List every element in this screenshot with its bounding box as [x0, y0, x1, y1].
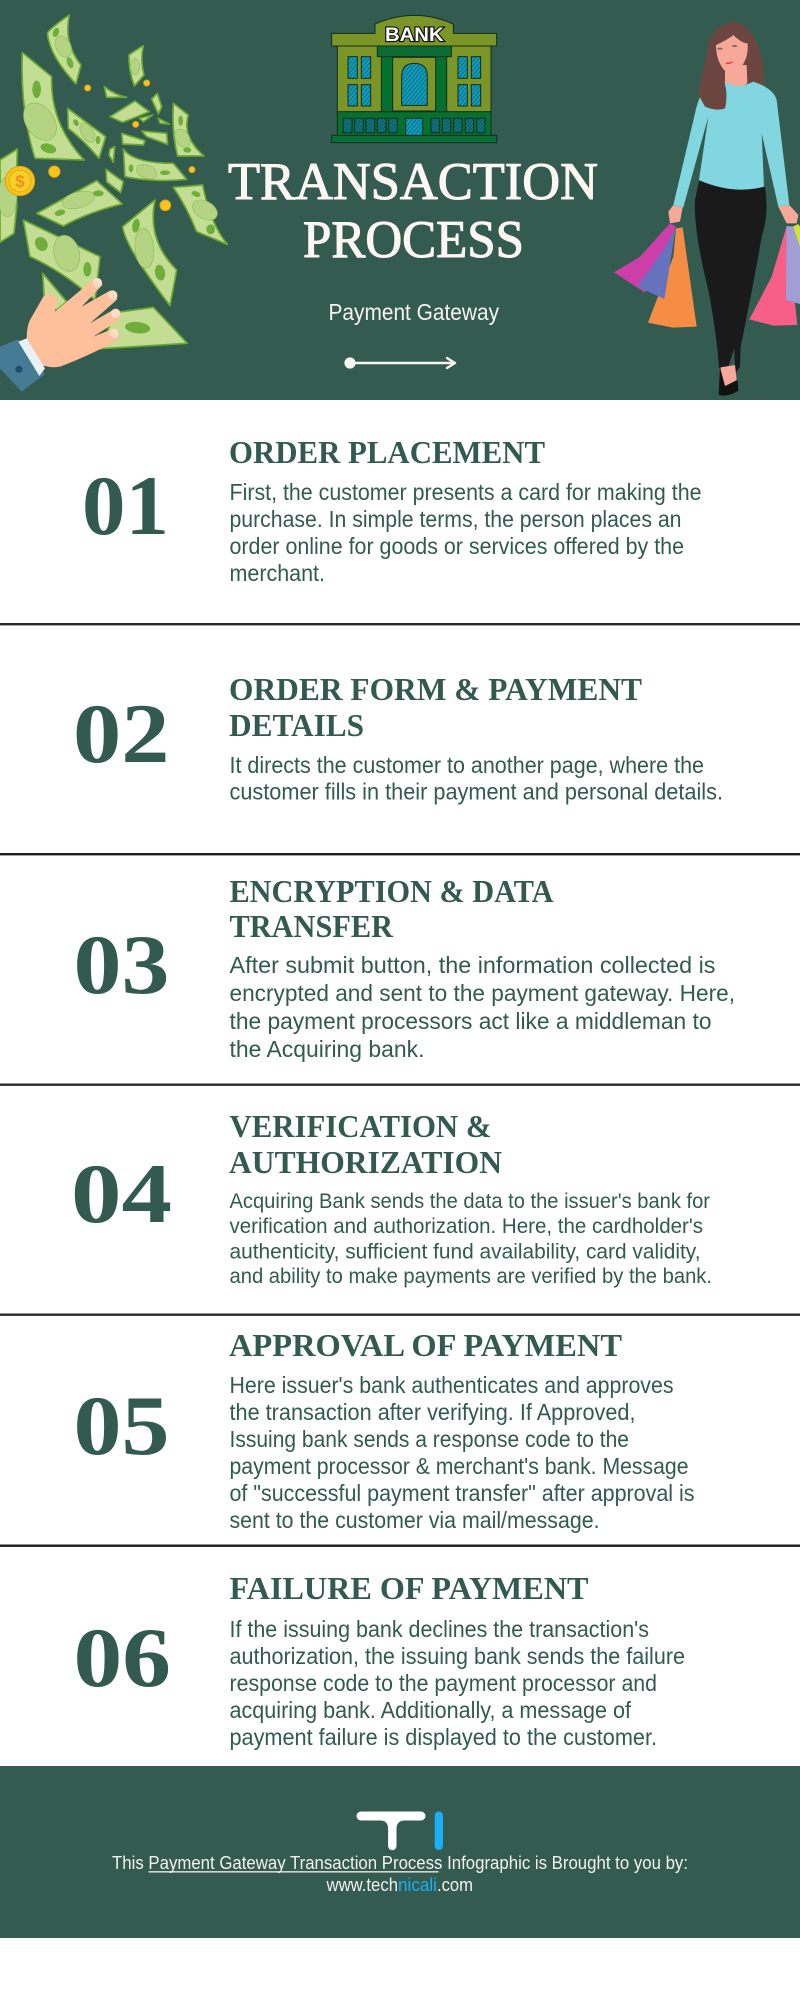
panel: step 1 order placement — [82, 434, 702, 586]
heading: encryption and data transfer — [230, 873, 554, 944]
icon: TI logo — [356, 1812, 443, 1850]
icon: hand with sleeve — [0, 278, 120, 392]
title: PROCESS — [303, 211, 524, 269]
title — [228, 153, 598, 269]
icon: bank windows — [343, 57, 485, 135]
text: website: nicali — [398, 1875, 437, 1895]
text: step 5 description: the transaction after verifying. If Approved, — [230, 1399, 636, 1425]
step number 01: 01 — [82, 459, 169, 553]
footer panel — [0, 1766, 800, 1938]
text: step 3 description — [230, 952, 735, 1062]
text: step 5 description — [230, 1372, 694, 1533]
text: step 6 description: acquiring bank. Additionally, a message of — [230, 1697, 631, 1723]
text: step 3 description: After submit button, the information collected is — [230, 952, 716, 978]
step number 04: 04 — [71, 1147, 172, 1241]
header panel — [0, 0, 800, 400]
text: step 5 description: Here issuer's bank authenticates and approves — [230, 1372, 674, 1398]
text: step 2 description — [230, 752, 723, 804]
text: step 6 description: If the issuing bank declines the transaction's — [230, 1616, 649, 1642]
step number 02: 02 — [73, 687, 170, 781]
heading: order form and payment details — [229, 671, 642, 743]
subtitle: Payment Gateway — [328, 299, 499, 325]
step number 06: 06 — [74, 1611, 171, 1705]
heading: encryption and data transfer: TRANSFER — [230, 908, 394, 944]
heading: order form and payment details: ORDER FORM & PAYMENT — [229, 671, 642, 707]
heading: order form and payment details: DETAILS — [229, 707, 364, 743]
icon: banknotes — [0, 15, 227, 349]
bank sign: BANK — [385, 25, 444, 46]
heading: verification and authorization: AUTHORIZATION — [229, 1144, 502, 1180]
text: step 6 description — [230, 1616, 685, 1750]
icon: flying money and hand — [0, 15, 227, 392]
title: TRANSACTION — [228, 153, 598, 211]
text: step 3 description: encrypted and sent to the payment gateway. Here, — [230, 980, 735, 1006]
text: step 6 description: response code to the payment processor and — [230, 1670, 657, 1696]
text: step 4 description: verification and authorization. Here, the cardholder's — [230, 1214, 703, 1238]
text: step 4 description — [230, 1189, 712, 1288]
text: website: www.tech — [326, 1875, 398, 1895]
heading: failure of payment: FAILURE OF PAYMENT — [230, 1570, 588, 1606]
heading: encryption and data transfer: ENCRYPTION & DATA — [230, 873, 554, 909]
text: step 1 description: purchase. In simple terms, the person places an — [230, 506, 682, 532]
text: step 5 description: sent to the customer via mail/message. — [230, 1507, 600, 1533]
panel: step 4 verification and authorization — [71, 1108, 712, 1288]
text: step 2 description: customer fills in their payment and personal details. — [230, 778, 723, 804]
text: step 3 description: the Acquiring bank. — [230, 1036, 424, 1062]
icon: bank building — [332, 15, 497, 143]
text: step 4 description: and ability to make payments are verified by the bank. — [230, 1264, 712, 1288]
text: step 4 description: authenticity, sufficient fund availability, card validity, — [230, 1240, 700, 1264]
text: website — [326, 1875, 473, 1895]
text: step 2 description: It directs the customer to another page, where the — [230, 752, 704, 778]
arrow — [344, 357, 455, 369]
text: footer credit: This Payment Gateway Transaction Process Infographic is Brought to you by: — [112, 1853, 688, 1873]
panel: step 3 encryption and data transfer — [74, 873, 735, 1062]
text: step 1 description: order online for goods or services offered by the — [230, 533, 684, 559]
heading: verification and authorization — [229, 1108, 502, 1180]
text: step 5 description: Issuing bank sends a response code to the — [230, 1426, 629, 1452]
icon: gold coins: $ — [15, 172, 25, 191]
text: step 1 description: merchant. — [230, 560, 325, 586]
icon: left shopping bags — [614, 223, 697, 328]
text: step 6 description: payment failure is displayed to the customer. — [230, 1724, 657, 1750]
text: website: .com — [437, 1875, 473, 1895]
panel: step 2 order form and payment details — [73, 671, 723, 804]
text: step 6 description: authorization, the issuing bank sends the failure — [230, 1643, 685, 1669]
heading: approval of payment: APPROVAL OF PAYMENT — [229, 1327, 622, 1363]
text: step 1 description — [230, 479, 702, 586]
icon: right shopping bags — [749, 224, 800, 326]
text: step 3 description: the payment processors act like a middleman to — [230, 1008, 712, 1034]
step number 03: 03 — [74, 918, 170, 1012]
panel: step 5 approval of payment — [74, 1327, 694, 1533]
heading: verification and authorization: VERIFICATION & — [230, 1108, 492, 1144]
panel: step 6 failure of payment — [74, 1570, 685, 1750]
text: step 5 description: of "successful payment transfer" after approval is — [230, 1480, 694, 1506]
step number 05: 05 — [74, 1379, 170, 1473]
text: step 4 description: Acquiring Bank sends the data to the issuer's bank for — [230, 1189, 710, 1213]
icon: gold coins — [5, 80, 195, 211]
text: step 5 description: payment processor & merchant's bank. Message — [230, 1453, 688, 1479]
heading: order placement: ORDER PLACEMENT — [229, 434, 545, 470]
icon: woman with shopping bags — [614, 22, 800, 396]
text: step 1 description: First, the customer presents a card for making the — [230, 479, 702, 505]
